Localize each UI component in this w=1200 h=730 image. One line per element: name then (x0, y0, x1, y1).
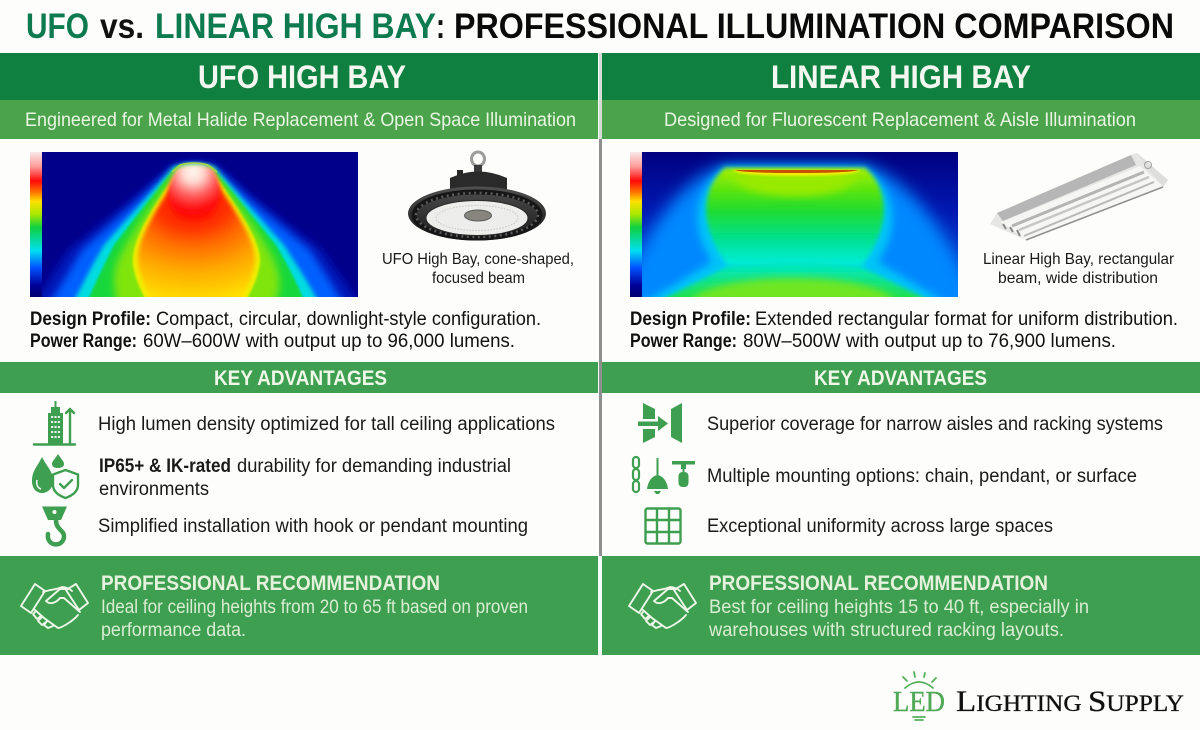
UFO professional recommendation: Ideal for ceiling heights from 20 to 65 ft based on proven (101, 597, 528, 618)
Linear beam heat map (630, 152, 958, 297)
Linear professional recommendation: warehouses with structured racking layouts. (708, 620, 1064, 641)
Linear specifications: 80W–500W with output up to 76,900 lumens. (743, 331, 1116, 352)
UFO key advantages heading: KEY ADVANTAGES (214, 367, 387, 390)
Linear professional recommendation (602, 556, 1200, 655)
icon: chain, pendant and surface mounts (633, 457, 695, 494)
center divider (599, 53, 602, 556)
advantage text 3: Simplified installation with hook or pendant mounting (98, 516, 528, 537)
Linear fixture photo (990, 153, 1168, 240)
advantage text 6: Exceptional uniformity across large spaces (707, 516, 1053, 537)
UFO fixture caption: focused beam (432, 270, 525, 287)
UFO professional recommendation: performance data. (101, 620, 246, 641)
logo: LED Lighting Supply: LED (893, 686, 945, 718)
icon: crane hook (42, 506, 67, 544)
Linear fixture caption (983, 251, 1175, 287)
advantage text 4: Superior coverage for narrow aisles and racking systems (707, 414, 1163, 435)
Linear key advantages heading: KEY ADVANTAGES (814, 367, 987, 390)
icon: narrow aisle arrow (638, 403, 682, 443)
Linear subheader band: Designed for Fluorescent Replacement & Aisle Illumination (664, 109, 1136, 131)
UFO fixture photo (408, 152, 546, 240)
UFO beam heat map (30, 152, 358, 297)
advantage text 2: environments (99, 479, 209, 500)
Linear key advantages heading (602, 362, 1200, 393)
icon: handshake (629, 584, 696, 628)
UFO specifications (30, 309, 541, 352)
Linear specifications: Extended rectangular format for uniform distribution. (755, 309, 1178, 330)
icon: water drops and shield (32, 454, 78, 498)
advantage text 2: durability for demanding industrial (237, 456, 511, 477)
UFO specifications: 60W–600W with output up to 96,000 lumens. (143, 331, 515, 352)
UFO subheader band: Engineered for Metal Halide Replacement & Open Space Illumination (25, 109, 576, 131)
UFO fixture caption: UFO High Bay, cone-shaped, (382, 251, 574, 268)
title: vs. (100, 7, 144, 46)
title: LINEAR HIGH BAY (155, 7, 436, 46)
Linear subheader band (602, 100, 1200, 139)
UFO fixture caption (382, 251, 574, 287)
UFO key advantages heading (0, 362, 598, 393)
Linear specifications: Power Range: (630, 331, 737, 352)
UFO professional recommendation (0, 556, 598, 655)
advantage text 2 (99, 456, 511, 500)
icon: tall building with arrow (34, 401, 75, 444)
title: UFO (26, 7, 89, 46)
Linear fixture caption: Linear High Bay, rectangular (983, 251, 1175, 268)
UFO professional recommendation: PROFESSIONAL RECOMMENDATION (101, 572, 440, 595)
Linear professional recommendation: PROFESSIONAL RECOMMENDATION (709, 572, 1048, 595)
Linear header band: LINEAR HIGH BAY (771, 59, 1031, 95)
Linear specifications (630, 309, 1178, 352)
logo: LED Lighting Supply (893, 672, 1184, 720)
Linear professional recommendation: Best for ceiling heights 15 to 40 ft, especially in (709, 597, 1089, 618)
panel: UFO high bay (0, 53, 598, 655)
Linear fixture caption: beam, wide distribution (998, 270, 1158, 287)
icon: uniform grid (646, 508, 680, 544)
title (26, 7, 1174, 46)
title: : (436, 7, 445, 46)
UFO header band (0, 53, 598, 100)
panel: Linear high bay (602, 53, 1200, 655)
icon: light bulb rays (903, 672, 936, 720)
UFO subheader band (0, 100, 598, 139)
icon: handshake (21, 584, 88, 628)
UFO specifications: Power Range: (30, 331, 137, 352)
advantage text 5: Multiple mounting options: chain, pendant, or surface (707, 466, 1137, 487)
UFO specifications: Design Profile: (30, 309, 151, 330)
advantage text 2: IP65+ & IK-rated (99, 456, 231, 477)
UFO header band: UFO HIGH BAY (198, 59, 406, 95)
logo: LED Lighting Supply: LIGHTING SUPPLY (956, 685, 1184, 718)
advantage text 1: High lumen density optimized for tall ceiling applications (98, 414, 555, 435)
Linear header band (602, 53, 1200, 100)
Linear specifications: Design Profile: (630, 309, 751, 330)
UFO specifications: Compact, circular, downlight-style configuration. (156, 309, 541, 330)
